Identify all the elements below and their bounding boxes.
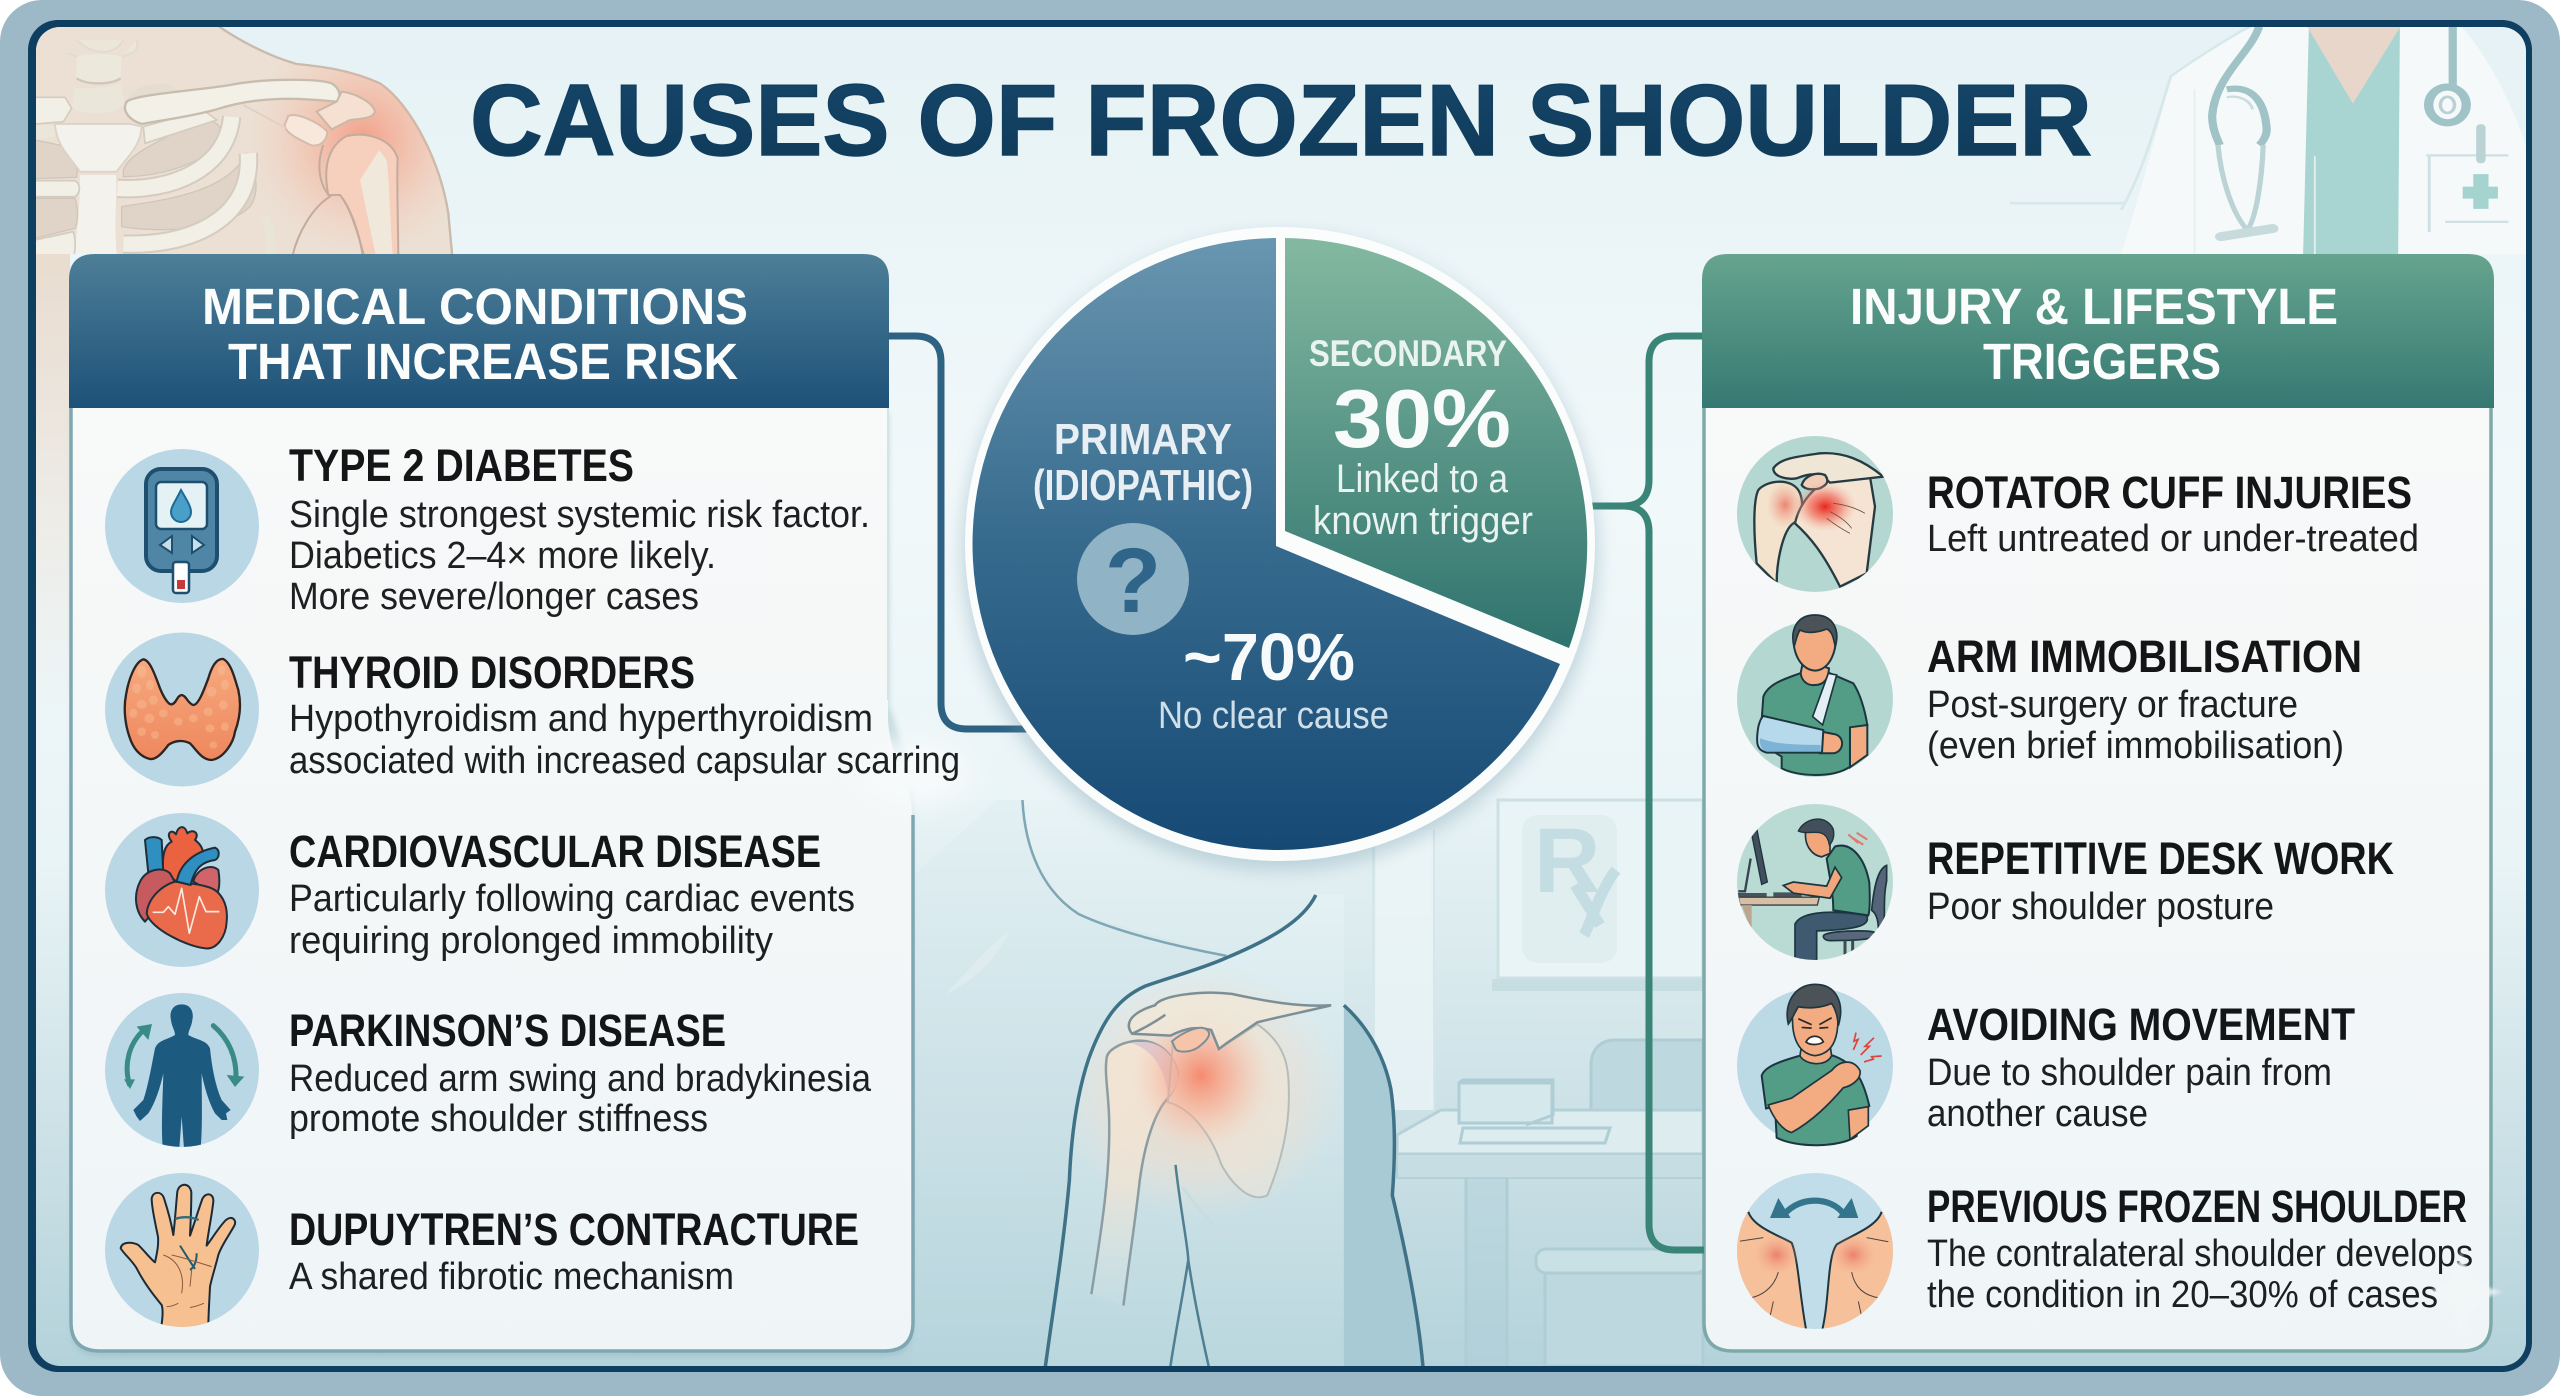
icon: person at desk: [1737, 804, 1893, 962]
background illustration: shoulder and torso: [913, 800, 1423, 1366]
label: secondary: 30%: [1333, 372, 1511, 465]
icon: thyroid: [105, 632, 259, 786]
heading: injury triggers: [1702, 254, 2494, 408]
item: previous frozen shoulder: the condition in 20–30% of cases: [1927, 1274, 2438, 1316]
title: CAUSES OF FROZEN SHOULDER: [470, 65, 2092, 177]
label: 70 percent: No clear cause: [1158, 695, 1389, 737]
item: thyroid disorders: THYROID DISORDERS: [289, 647, 695, 698]
item: dupuytren's contracture: DUPUYTREN’S CONTRACTURE: [289, 1204, 859, 1255]
item: parkinson's disease: PARKINSON’S DISEASE: [289, 1005, 726, 1056]
icon: arm in sling: [1737, 615, 1893, 777]
item: previous frozen shoulder: [1733, 1173, 2473, 1332]
panel: injury and lifestyle triggers: [1702, 254, 2494, 1351]
item: avoiding movement: Due to shoulder pain from: [1927, 1052, 2332, 1094]
heading: medical conditions: MEDICAL CONDITIONS: [202, 278, 748, 335]
item: cardiovascular disease: Particularly following cardiac events: [289, 878, 855, 920]
item: thyroid disorders: associated with increased capsular scarring: [289, 740, 960, 782]
item: previous frozen shoulder: The contralateral shoulder develops: [1927, 1233, 2473, 1275]
item: rotator cuff injuries: Left untreated or under-treated: [1927, 518, 2419, 560]
label: secondary: known trigger: [1313, 499, 1533, 543]
label: secondary: Linked to a: [1336, 457, 1509, 501]
slice: secondary 30%: [1285, 238, 1587, 648]
item: type 2 diabetes: Diabetics 2–4× more likely.: [289, 535, 716, 577]
item: avoiding movement: [1737, 984, 2355, 1145]
background illustration: skeleton shoulder: [30, 20, 477, 720]
icon: glucose meter: [105, 449, 259, 603]
item: cardiovascular disease: requiring prolonged immobility: [289, 920, 773, 962]
item: thyroid disorders: Hypothyroidism and hyperthyroidism: [289, 698, 873, 740]
pie chart: [962, 227, 1598, 870]
heading: injury triggers: TRIGGERS: [1983, 333, 2221, 390]
item: cardiovascular disease: [105, 813, 855, 967]
item: rotator cuff injuries: [1737, 436, 2419, 592]
item: repetitive desk work: Poor shoulder posture: [1927, 886, 2274, 928]
label: 70 percent: [1158, 620, 1389, 737]
item: arm immobilisation: (even brief immobilisation): [1927, 725, 2344, 767]
item: parkinson's disease: [105, 993, 872, 1148]
heading: medical conditions: THAT INCREASE RISK: [228, 333, 738, 390]
item: dupuytren's contracture: A shared fibrotic mechanism: [289, 1256, 734, 1298]
watermark sparkle: [2426, 1250, 2503, 1335]
slice: primary 70%: [973, 238, 1560, 850]
icon: Rx sign: R: [1534, 810, 1600, 912]
item: arm immobilisation: ARM IMMOBILISATION: [1927, 631, 2362, 682]
label: primary: (IDIOPATHIC): [1033, 461, 1253, 510]
connector: injury triggers to secondary: [1580, 336, 1704, 1250]
icon: question mark: [1077, 523, 1189, 635]
item: avoiding movement: AVOIDING MOVEMENT: [1927, 999, 2355, 1050]
item: avoiding movement: another cause: [1927, 1093, 2148, 1135]
item: type 2 diabetes: [105, 440, 870, 618]
item: parkinson's disease: promote shoulder stiffness: [289, 1098, 708, 1140]
item: type 2 diabetes: TYPE 2 DIABETES: [289, 440, 634, 491]
item: repetitive desk work: REPETITIVE DESK WORK: [1927, 833, 2394, 884]
background illustration: doctor: [2010, 25, 2526, 254]
item: type 2 diabetes: Single strongest systemic risk factor.: [289, 494, 870, 536]
icon: question mark: ?: [1105, 530, 1161, 632]
icon: hand: [105, 1173, 259, 1328]
item: parkinson's disease: Reduced arm swing and bradykinesia: [289, 1058, 872, 1100]
item: rotator cuff injuries: ROTATOR CUFF INJURIES: [1927, 467, 2412, 518]
item: type 2 diabetes: More severe/longer cases: [289, 576, 699, 618]
icon: man in pain: [1737, 984, 1893, 1145]
icon: heart: [105, 813, 259, 967]
item: thyroid disorders: [105, 632, 960, 786]
icon: both shoulders: [1733, 1173, 1897, 1332]
icon: shoulder joint injury: [1737, 436, 1893, 592]
heading: injury triggers: INJURY & LIFESTYLE: [1850, 278, 2338, 335]
label: 70 percent: ~70%: [1183, 620, 1355, 695]
item: repetitive desk work: [1737, 804, 2394, 962]
heading: medical conditions: [69, 254, 889, 408]
label: primary: PRIMARY: [1054, 415, 1232, 464]
label: secondary: SECONDARY: [1309, 333, 1507, 374]
item: dupuytren's contracture: [105, 1173, 859, 1328]
label: secondary: [1309, 333, 1533, 543]
item: arm immobilisation: Post-surgery or fracture: [1927, 684, 2298, 726]
label: primary: [1033, 415, 1253, 510]
item: cardiovascular disease: CARDIOVASCULAR DISEASE: [289, 826, 821, 877]
icon: body silhouette with arrows: [105, 993, 259, 1148]
item: arm immobilisation: [1737, 615, 2362, 777]
background illustration: office room: [1344, 800, 1707, 1366]
panel: medical conditions: [69, 254, 970, 1356]
connector: medical conditions to primary: [889, 336, 1040, 729]
